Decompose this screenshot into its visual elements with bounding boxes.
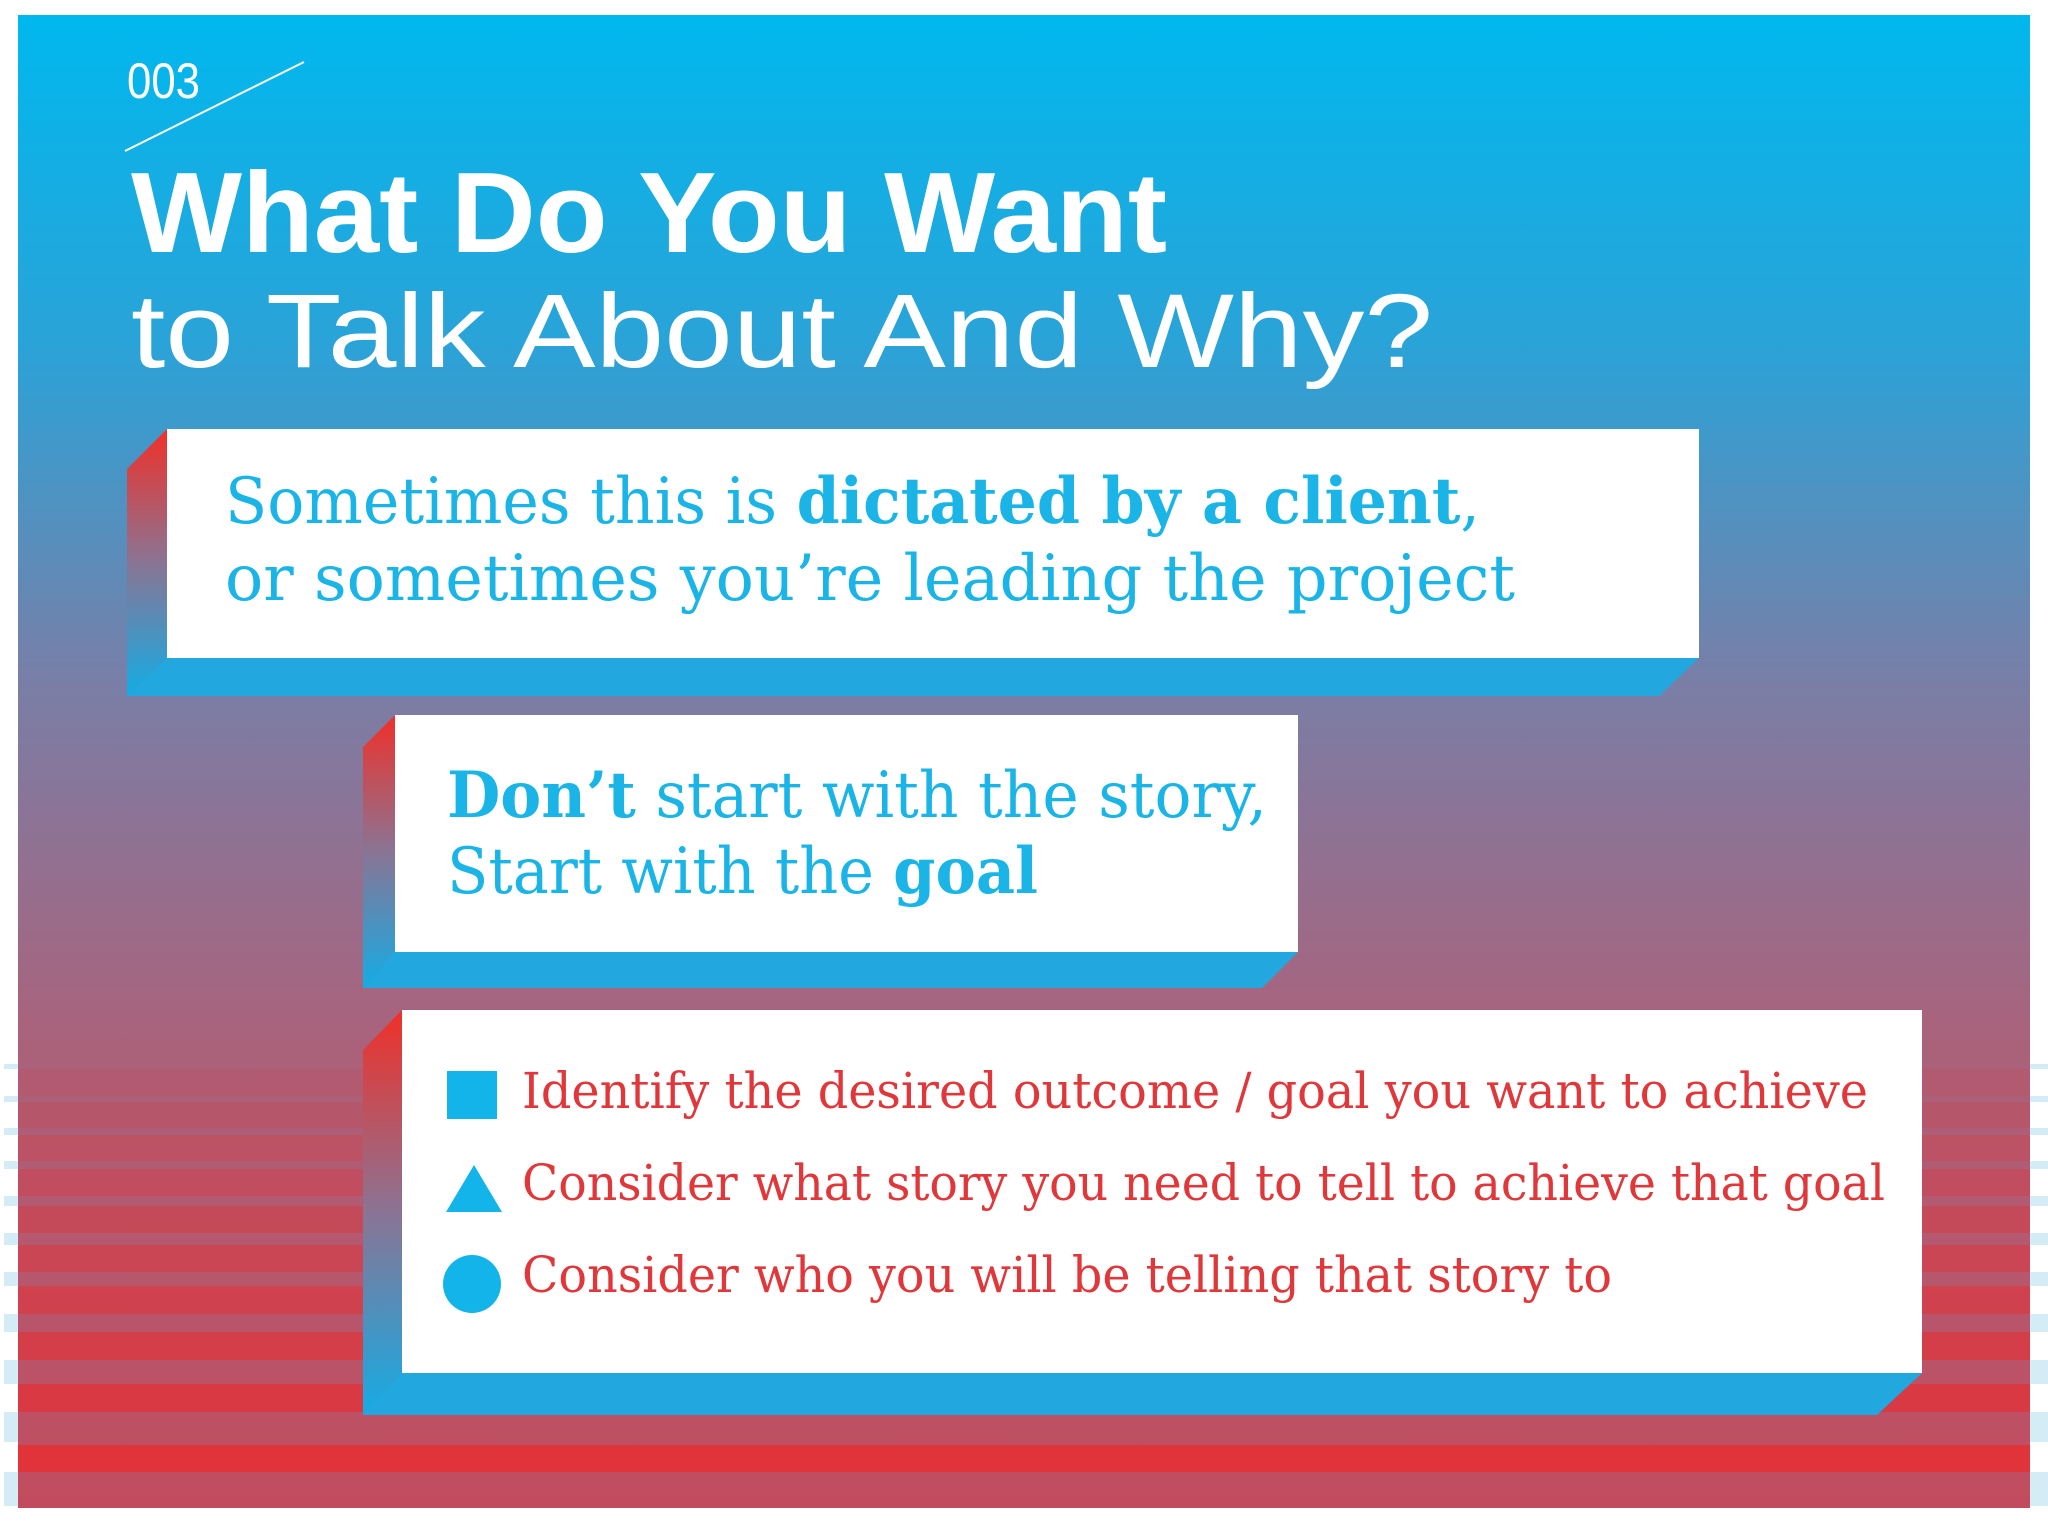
icon: circle	[443, 1255, 501, 1313]
panel: start with the goal	[363, 715, 1298, 988]
icon: triangle	[446, 1165, 502, 1212]
side dashes	[4, 1064, 2048, 1506]
stripes	[18, 1069, 2030, 1472]
panel: client or leading: or sometimes you’re leading the project	[225, 542, 1515, 616]
title: What Do You Want	[131, 150, 1167, 277]
panel: goal steps list	[363, 1010, 1922, 1415]
section number 003: 003	[127, 53, 200, 109]
list text	[522, 1062, 1885, 1304]
list text: Identify the desired outcome / goal you want to achieve	[522, 1062, 1868, 1120]
panel: client or leading: Sometimes this is dictated by a client,	[225, 464, 1480, 539]
panel: client or leading	[127, 429, 1699, 696]
list text: Consider what story you need to tell to achieve that goal	[522, 1154, 1885, 1212]
title	[131, 150, 1433, 390]
list text: Consider who you will be telling that story to	[522, 1246, 1612, 1304]
panel: start with the goal: Start with the goal	[447, 834, 1038, 909]
title: to Talk About And Why?	[131, 273, 1433, 390]
section number 003	[125, 53, 304, 151]
panel: start with the goal: Don’t start with the story,	[447, 758, 1267, 833]
icon: square	[447, 1071, 497, 1119]
